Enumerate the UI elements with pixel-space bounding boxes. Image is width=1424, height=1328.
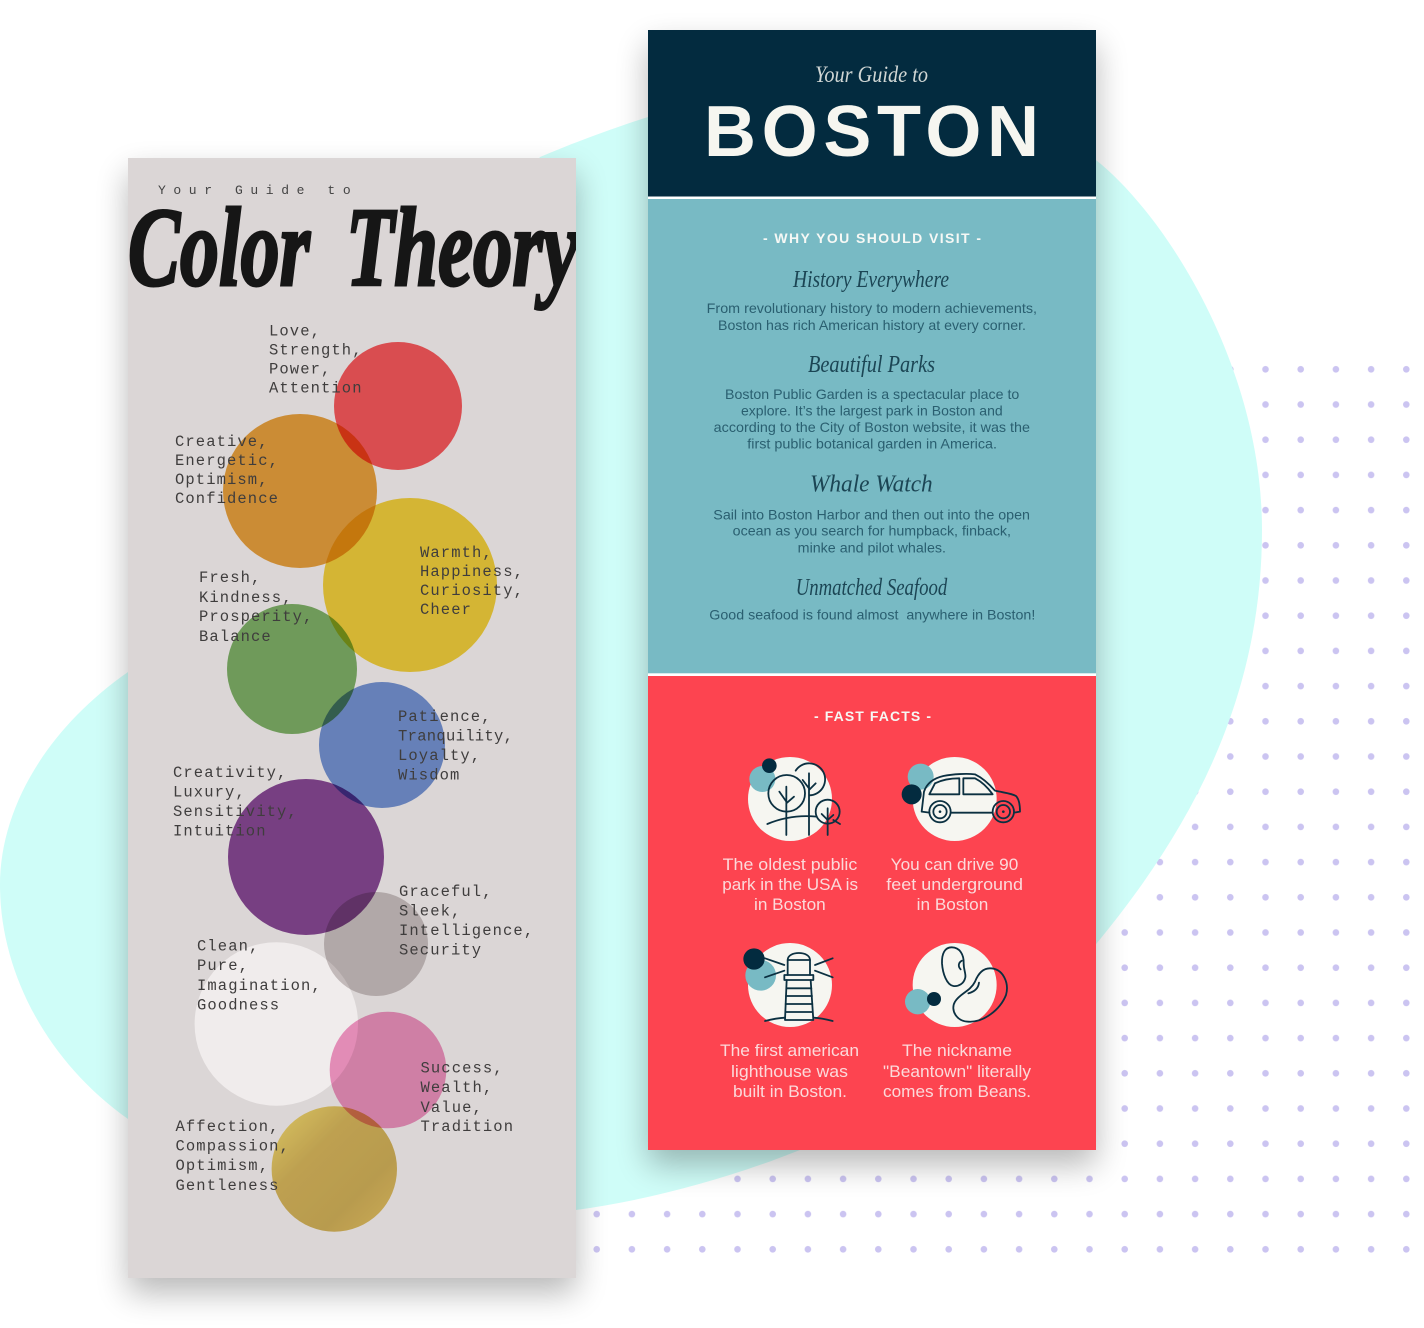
- text: yellow meanings: Happiness,: [420, 563, 524, 581]
- text: green meanings: Prosperity,: [199, 608, 313, 626]
- item: whale watch: [713, 472, 1030, 556]
- text: red meanings: Love,: [269, 322, 321, 340]
- text: green meanings: [199, 569, 313, 646]
- section background: [648, 676, 1096, 1150]
- text: orange meanings: Energetic,: [175, 452, 279, 470]
- section background: [648, 199, 1096, 673]
- text: gray meanings: Graceful,: [399, 883, 493, 901]
- card shadow backing: [648, 30, 1096, 1150]
- fact: first lighthouse: built in Boston.: [733, 1082, 847, 1101]
- text: blue meanings: Tranquility,: [398, 728, 513, 746]
- text: green meanings: Balance: [199, 628, 272, 646]
- item: whale watch: Whale Watch: [810, 472, 933, 498]
- text: red meanings: Power,: [269, 360, 331, 378]
- title: color theory: [130, 206, 576, 311]
- text: pink meanings: Tradition: [420, 1118, 514, 1136]
- item: beautiful parks: explore. It’s the largest park in Boston and: [741, 402, 1003, 418]
- text: purple meanings: Sensitivity,: [173, 803, 298, 821]
- icon: trees: [748, 757, 840, 841]
- fact: first lighthouse: [720, 1041, 859, 1101]
- fact: beantown: "Beantown" literally: [883, 1062, 1032, 1081]
- section heading: - WHY YOU SHOULD VISIT -: [763, 230, 981, 246]
- text: pink meanings: [420, 1060, 514, 1136]
- text: pink meanings: Value,: [420, 1099, 483, 1117]
- item: beautiful parks: according to the City of Boston website, it was the: [714, 419, 1030, 435]
- color circles: [195, 342, 497, 1232]
- fact: oldest park: park in the USA is: [722, 875, 858, 894]
- item: history everywhere: Boston has rich American history at every corner.: [718, 317, 1026, 333]
- title: color theory: Theory: [346, 186, 579, 310]
- background mint blob: [0, 117, 1262, 1210]
- text: white meanings: Goodness: [197, 996, 280, 1014]
- fact: drive underground: in Boston: [917, 895, 988, 914]
- fact: beantown: [883, 1041, 1032, 1101]
- fact: oldest park: The oldest public: [723, 855, 858, 874]
- fact: drive underground: You can drive 90: [891, 855, 1018, 874]
- fact: oldest park: [722, 855, 858, 914]
- panel: boston card: [648, 30, 1096, 1150]
- text: yellow meanings: [420, 544, 524, 619]
- icon: lighthouse: [743, 943, 833, 1027]
- text: white meanings: Imagination,: [197, 977, 322, 995]
- item: history everywhere: [707, 267, 1037, 333]
- text: purple meanings: Creativity,: [173, 764, 287, 782]
- text: blue meanings: Wisdom: [398, 766, 460, 784]
- text: purple meanings: [173, 764, 298, 840]
- text: gold meanings: Gentleness: [176, 1177, 280, 1195]
- title: boston: BOSTON: [704, 92, 1039, 172]
- fact: drive underground: feet underground: [886, 875, 1023, 894]
- kicker: your guide to: Your Guide to: [158, 183, 358, 198]
- item: history everywhere: History Everywhere: [792, 267, 949, 293]
- text: gold meanings: Affection,: [176, 1118, 280, 1136]
- text: white meanings: Pure,: [197, 957, 249, 975]
- fact: beantown: The nickname: [902, 1041, 1012, 1060]
- item: whale watch: ocean as you search for humpback, finback,: [733, 523, 1011, 539]
- text: gray meanings: [399, 883, 534, 960]
- text: pink meanings: Success,: [420, 1060, 504, 1078]
- text: blue meanings: Loyalty,: [398, 747, 481, 765]
- text: blue meanings: Patience,: [398, 708, 492, 726]
- text: orange meanings: [175, 433, 279, 508]
- text: purple meanings: Intuition: [173, 822, 267, 840]
- text: yellow meanings: Curiosity,: [420, 582, 524, 600]
- text: green meanings: Fresh,: [199, 569, 261, 587]
- text: red meanings: Attention: [269, 380, 363, 398]
- item: unmatched seafood: [709, 575, 1035, 622]
- item: beautiful parks: first public botanical garden in America.: [747, 435, 997, 451]
- section: fast facts: [648, 676, 1096, 1150]
- header background: [648, 30, 1096, 196]
- panel: color theory card: [128, 158, 579, 1278]
- item: beautiful parks: Beautiful Parks: [808, 352, 935, 378]
- item: beautiful parks: Boston Public Garden is a spectacular place to: [725, 386, 1020, 402]
- background dot grid: [579, 352, 1424, 1267]
- text: red meanings: Strength,: [269, 342, 363, 360]
- text: gray meanings: Security: [399, 942, 482, 960]
- title: color theory: Color: [128, 186, 311, 310]
- item: beautiful parks: [714, 352, 1030, 451]
- text: orange meanings: Confidence: [175, 490, 279, 508]
- section: why you should visit: [648, 199, 1096, 673]
- text: white meanings: [197, 938, 322, 1014]
- text: gray meanings: Intelligence,: [399, 922, 534, 940]
- item: whale watch: Sail into Boston Harbor and then out into the open: [713, 506, 1030, 522]
- section heading: - FAST FACTS -: [814, 708, 931, 724]
- text: orange meanings: Creative,: [175, 433, 269, 451]
- fact: first lighthouse: lighthouse was: [731, 1062, 848, 1081]
- text: gray meanings: Sleek,: [399, 902, 461, 920]
- fact: first lighthouse: The first american: [720, 1041, 859, 1060]
- fact: beantown: comes from Beans.: [883, 1082, 1031, 1101]
- item: history everywhere: From revolutionary history to modern achievements,: [707, 300, 1037, 316]
- item: unmatched seafood: Good seafood is found almost anywhere in Boston!: [709, 606, 1035, 622]
- icon: car: [902, 757, 1020, 841]
- card background: [128, 158, 576, 1278]
- kicker: your guide to: Your Guide to: [815, 62, 928, 87]
- fact: oldest park: in Boston: [754, 895, 826, 914]
- header band: [648, 30, 1096, 196]
- item: unmatched seafood: Unmatched Seafood: [796, 575, 948, 601]
- item: whale watch: minke and pilot whales.: [798, 540, 946, 556]
- text: gold meanings: [176, 1118, 290, 1195]
- text: blue meanings: [398, 708, 513, 784]
- text: yellow meanings: Cheer: [420, 601, 472, 619]
- text: orange meanings: Optimism,: [175, 471, 269, 489]
- icon: beans: [905, 943, 1007, 1027]
- text: gold meanings: Optimism,: [176, 1157, 269, 1175]
- text: yellow meanings: Warmth,: [420, 544, 493, 562]
- text: gold meanings: Compassion,: [176, 1138, 290, 1156]
- fact: drive underground: [886, 855, 1023, 914]
- text: green meanings: Kindness,: [199, 589, 293, 607]
- text: purple meanings: Luxury,: [173, 784, 246, 802]
- text: red meanings: [269, 322, 363, 398]
- text: pink meanings: Wealth,: [420, 1079, 493, 1097]
- text: white meanings: Clean,: [197, 938, 259, 956]
